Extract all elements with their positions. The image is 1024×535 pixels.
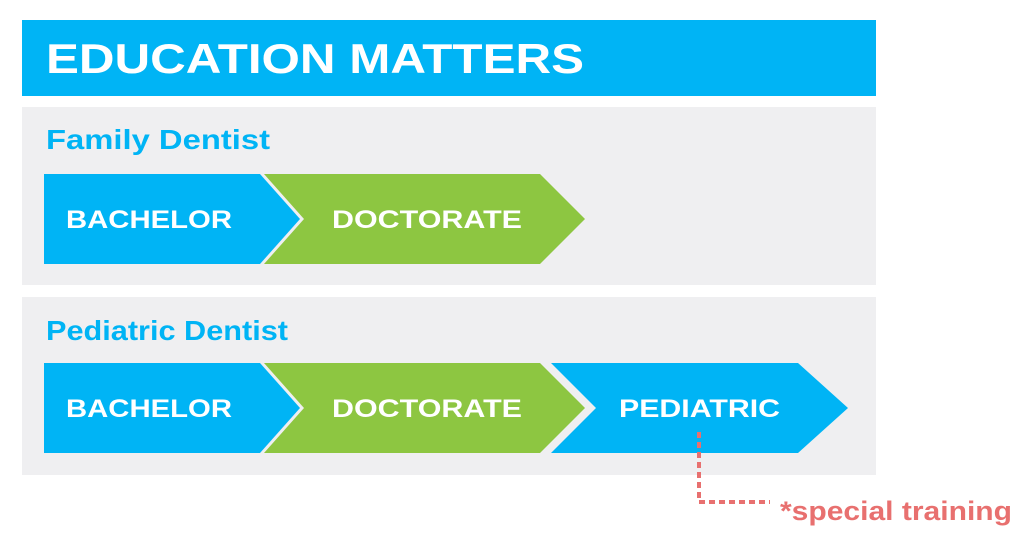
- row 2 doctorate: DOCTORATE: [332, 395, 522, 423]
- callout: special training: *special training: [780, 496, 1012, 526]
- row 2 pediatric: [551, 363, 848, 453]
- row 1 bachelor: BACHELOR: [66, 206, 232, 234]
- row 2 bachelor: [44, 363, 300, 453]
- heading: family dentist: Family Dentist: [46, 124, 270, 155]
- title: EDUCATION MATTERS: [46, 35, 584, 82]
- dotted connector: [699, 432, 770, 502]
- row 1 doctorate: DOCTORATE: [332, 206, 522, 234]
- row 1 doctorate: [264, 174, 585, 264]
- panel: pediatric dentist: [22, 297, 876, 475]
- title bar: [22, 20, 876, 96]
- row 2 bachelor: BACHELOR: [66, 395, 232, 423]
- panel: family dentist: [22, 107, 876, 285]
- row 2 pediatric: PEDIATRIC: [619, 395, 780, 423]
- row 2 doctorate: [264, 363, 585, 453]
- heading: pediatric dentist: Pediatric Dentist: [46, 315, 288, 346]
- row 1 bachelor: [44, 174, 300, 264]
